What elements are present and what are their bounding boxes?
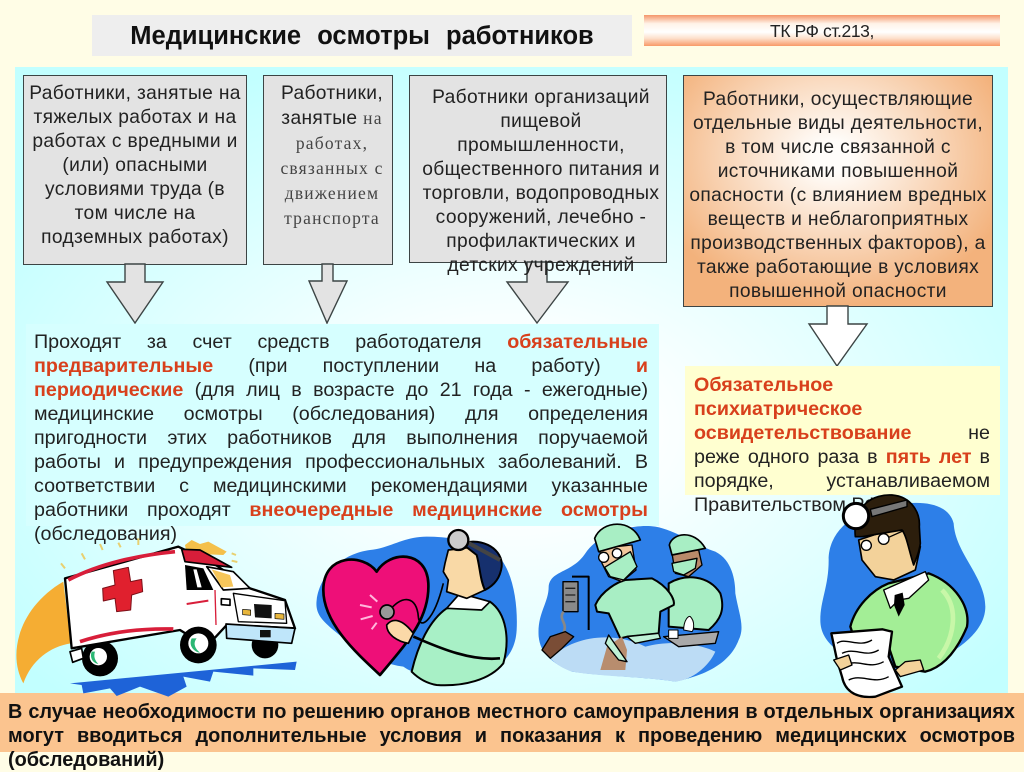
panel: transport workers [263,75,393,265]
icon: doctor reading report [820,495,985,697]
panel: psychiatric examination background [685,366,1000,495]
main text block: Проходят за счет средств работодателя обязательные [34,331,648,353]
main text block: соответствии с медицинскими рекомендациями указанные [34,475,648,497]
main text block: медицинские осмотры (обследования) для определения [34,403,648,425]
panel: workers in hazardous conditions [23,75,247,265]
text: hazardous conditions: Работники, занятые на [29,83,241,104]
legal reference bar: ТК РФ ст.213, [770,21,874,41]
main text block [34,331,648,545]
text: food, water, medical: детских учреждений [447,255,635,276]
text: special activities: также работающие в условиях [697,257,979,278]
text: food, water, medical: профилактических и [446,231,636,252]
text: hazardous conditions: том числе на [75,203,195,224]
text: special activities: повышенной опасности [729,281,947,302]
panel: main text background [26,324,659,526]
text: transport: Работники, [281,83,383,104]
text: transport: занятые на [281,108,383,129]
text: special activities: Работники, осуществляющие [703,89,973,110]
text: special activities: отдельные виды деятельности, [693,113,983,134]
psychiatric examination text [694,374,990,516]
psychiatric examination text: психиатрическое [694,398,862,420]
arrow 1 [107,264,163,323]
text: special activities: в том числе связанной с [725,137,951,158]
text: transport: движением [285,183,379,203]
psychiatric examination text: порядке, устанавливаемом [694,470,990,492]
title [92,15,632,56]
main text block: работники проходят внеочередные медицинские осмотры [34,499,648,521]
icon: doctor listening to heart [316,530,517,685]
text: transport: работах, [296,133,368,153]
arrow 2 [309,264,347,323]
bottom note text [8,701,1015,771]
arrow 3 [507,262,568,323]
text: food, water, medical [422,87,660,276]
legal reference bar [644,15,1000,46]
text: special activities: источниками повышенной [718,161,958,182]
psychiatric examination text: освидетельствование не [694,422,990,444]
text: food, water, medical: пищевой [500,111,582,132]
text: hazardous conditions: работах с вредными и [32,131,238,152]
bottom note text: могут вводиться дополнительные условия и показания к проведению медицинских осмотров [8,725,1015,747]
main text block: (обследования) [34,523,177,545]
text: hazardous conditions: тяжелых работах и на [33,107,237,128]
psychiatric examination text: реже одного раза в пять лет в [694,446,990,468]
panel: special activities workers [683,75,993,307]
bottom note text: В случае необходимости по решению органов местного самоуправления в отдельных организациях [8,701,1015,723]
main text block: работы и предупреждения профессиональных заболеваний. В [34,451,648,473]
arrow 4 [809,306,867,366]
main text block: предварительные (при поступлении на работу) и [34,355,648,377]
title: Медицинские осмотры работников [130,22,594,50]
panel: main gradient background [15,67,1008,693]
text: food, water, medical: общественного питания и [422,159,660,180]
icon: ambulance [16,538,297,697]
psychiatric examination text: Обязательное [694,374,833,396]
text: food, water, medical: Работники организаций [432,87,650,108]
panel: food, water and medical workers [409,75,667,263]
text: hazardous conditions [29,83,241,248]
text: special activities [689,89,987,302]
text: food, water, medical: промышленности, [457,135,625,156]
text: special activities: веществ и неблагоприятных [708,209,968,230]
icon: surgeons at operating table [539,524,742,682]
text: hazardous conditions: подземных работах) [41,227,229,248]
bottom note text: (обследований) [8,749,164,771]
main text block: пригодности этих работников для выполнения поручаемой [34,427,648,449]
text: food, water, medical: торговли, водопроводных [423,183,659,204]
bottom banner [0,693,1024,752]
text: transport: связанных с [280,158,384,178]
psychiatric examination text: Правительством РФ [694,494,879,516]
text: special activities: опасности (с влиянием вредных [689,185,987,206]
text: hazardous conditions: условиями труда (в [45,179,225,200]
text: special activities: производственных факторов), а [690,233,986,254]
text: transport [280,83,384,228]
main text block: периодические (для лиц в возрасте до 21 года - ежегодные) [34,379,648,401]
text: transport: транспорта [284,208,380,228]
text: hazardous conditions: (или) опасными [62,155,208,176]
text: food, water, medical: сооружений, лечебно - [436,207,646,228]
